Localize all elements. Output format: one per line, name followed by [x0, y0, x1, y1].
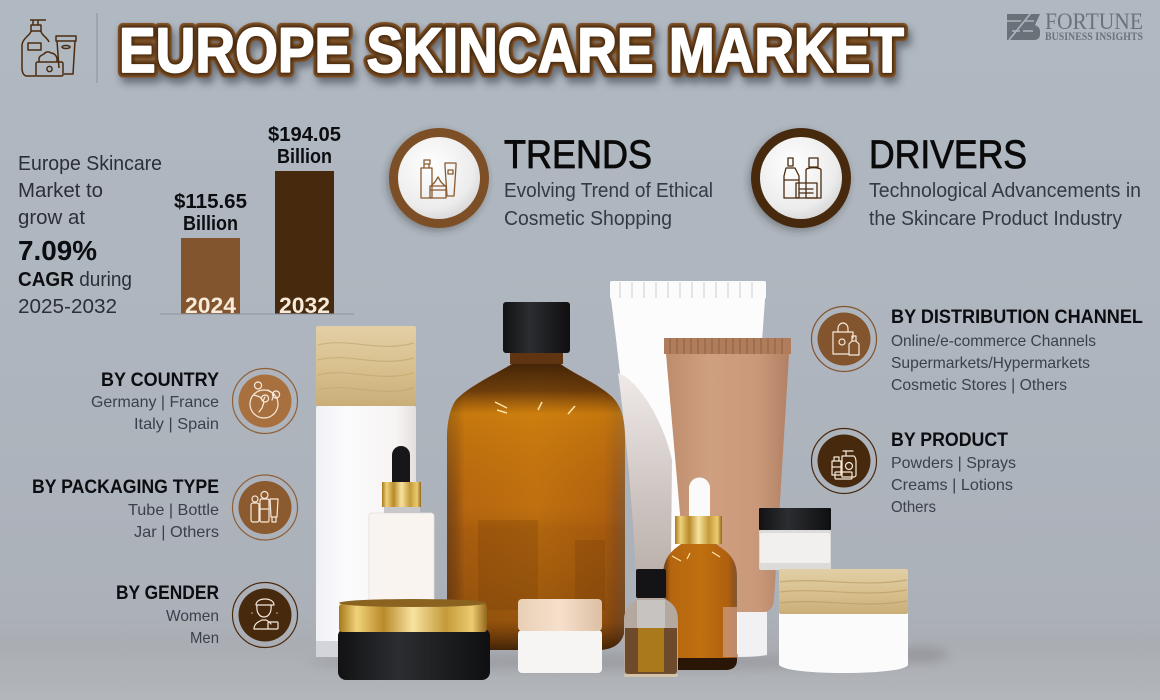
black and gold jar	[338, 599, 490, 680]
description: Evolving Trend of Ethical	[504, 180, 713, 202]
panel: trends	[389, 128, 713, 230]
CAGR text block: Europe Skincare	[18, 153, 162, 175]
text: by distribution channel: Online/e-commerce Channels	[891, 333, 1096, 350]
text: by country	[91, 370, 219, 433]
header divider	[96, 13, 98, 83]
icon: trends badge	[389, 128, 489, 228]
bar chart	[160, 124, 354, 318]
peach jar	[518, 599, 602, 673]
value label 2024	[174, 191, 247, 235]
bar 2032: 2032	[279, 293, 330, 318]
panel: by distribution channel	[812, 306, 1143, 394]
text: by gender: Men	[190, 630, 219, 647]
value label 2032	[268, 124, 341, 168]
logo: Fortune Business Insights: FORTUNE	[1045, 9, 1143, 34]
panel: by product	[812, 428, 1016, 516]
CAGR text block	[18, 153, 162, 318]
text: by distribution channel: Cosmetic Stores | Others	[891, 377, 1067, 394]
value label 2032: Billion	[277, 146, 332, 168]
text: by gender: BY GENDER	[116, 583, 219, 604]
text: by product	[891, 430, 1016, 516]
panel: by packaging type	[32, 475, 298, 541]
text: by packaging type	[32, 477, 219, 541]
text: by country: Italy | Spain	[134, 416, 219, 433]
value label 2024: Billion	[183, 213, 238, 235]
text: by packaging type: BY PACKAGING TYPE	[32, 477, 219, 498]
description	[869, 180, 1141, 230]
heading: TRENDS	[504, 133, 652, 177]
icon: drivers badge	[751, 128, 851, 228]
header icon: skincare products	[22, 20, 76, 76]
text: by gender: Women	[166, 608, 219, 625]
value label 2024: $115.65	[174, 191, 247, 213]
description	[504, 180, 713, 230]
description: Technological Advancements in	[869, 180, 1141, 202]
CAGR text block: 7.09%	[18, 235, 97, 266]
text: by product: Powders | Sprays	[891, 455, 1016, 472]
amber dropper bottle	[663, 478, 737, 670]
wood and white jar	[779, 569, 908, 673]
title: EUROPE SKINCARE MARKET	[119, 16, 904, 86]
panel: by gender	[116, 582, 298, 648]
white tube	[610, 281, 767, 657]
text: by packaging type: Tube | Bottle	[128, 502, 219, 519]
product photo group	[310, 281, 948, 680]
bar 2024	[181, 238, 240, 318]
large amber bottle	[447, 302, 625, 650]
panel: by country	[91, 368, 298, 434]
icon: woman with towel	[232, 582, 298, 648]
logo: Fortune Business Insights	[1007, 9, 1143, 43]
small clear bottle	[624, 569, 678, 677]
icon: tubes and bottles	[232, 475, 298, 540]
CAGR text block: Market to	[18, 180, 103, 202]
text: by country: BY COUNTRY	[101, 370, 219, 391]
small black-lid jar	[759, 508, 831, 570]
bar 2032	[275, 171, 334, 318]
text: by gender	[116, 583, 219, 647]
text: by product: Others	[891, 499, 936, 516]
CAGR text block: CAGR during	[18, 269, 132, 291]
icon: globe	[232, 368, 298, 434]
logo: Fortune Business Insights: BUSINESS INSIGHTS	[1045, 31, 1143, 43]
brown tube	[664, 338, 791, 612]
title: EUROPE SKINCARE MARKET	[119, 16, 904, 86]
tall white bottle with wood cap	[316, 326, 416, 657]
description: the Skincare Product Industry	[869, 208, 1122, 230]
heading: DRIVERS	[869, 133, 1027, 177]
text: by country: Germany | France	[91, 394, 219, 411]
icon: shopping bag	[812, 306, 876, 372]
text: by distribution channel	[891, 307, 1143, 394]
text: by product: Creams | Lotions	[891, 477, 1013, 494]
description: Cosmetic Shopping	[504, 208, 672, 230]
bar 2024: 2024	[185, 293, 237, 318]
icon: product bottles	[812, 428, 876, 494]
text: by packaging type: Jar | Others	[134, 524, 219, 541]
value label 2032: $194.05	[268, 124, 341, 146]
panel: drivers	[751, 128, 1141, 230]
CAGR text block: 2025-2032	[18, 296, 117, 318]
text: by product: BY PRODUCT	[891, 430, 1008, 451]
title: EUROPE SKINCARE MARKET	[119, 16, 904, 86]
white dropper bottle	[369, 446, 434, 602]
text: by distribution channel: Supermarkets/Hypermarkets	[891, 355, 1090, 372]
CAGR text block: grow at	[18, 207, 85, 229]
text: by distribution channel: BY DISTRIBUTION CHANNEL	[891, 307, 1143, 328]
